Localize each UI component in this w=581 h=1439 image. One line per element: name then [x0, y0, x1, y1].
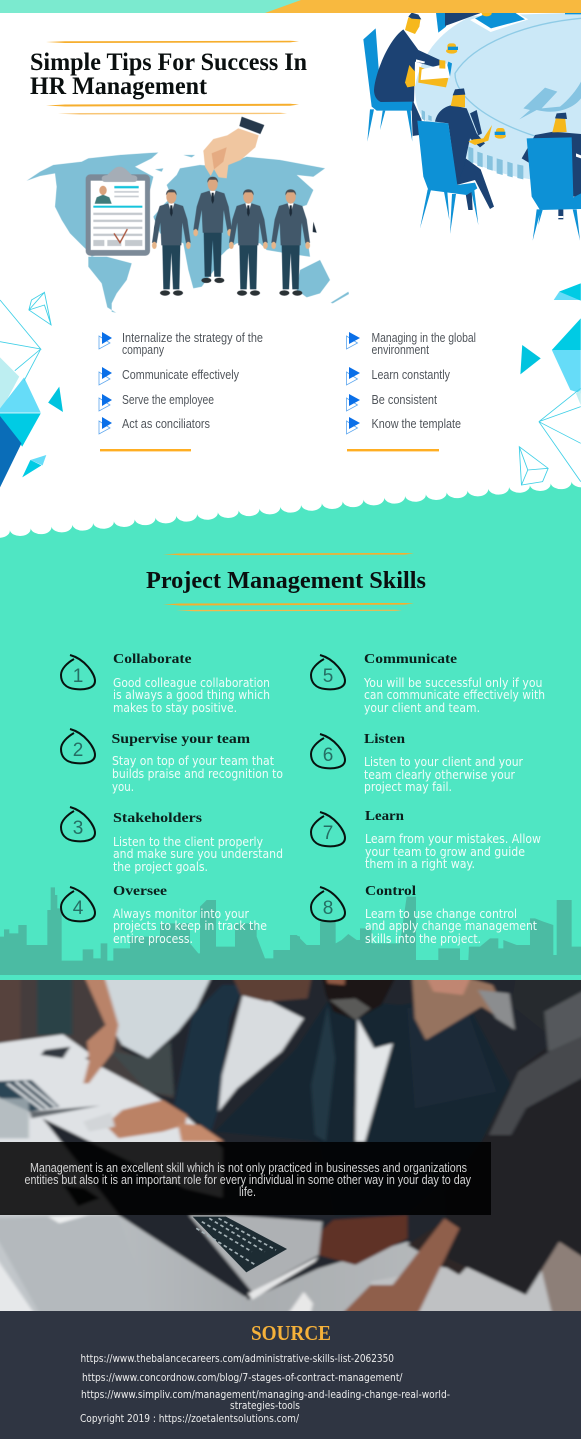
teal section background with scalloped edge: [0, 470, 581, 980]
skill 7: Learn: Learn: [365, 809, 404, 824]
skill 2: Supervise your team: you.: [112, 779, 134, 794]
bullet icon: [346, 332, 360, 349]
dark caption bar: life.: [239, 1185, 256, 1199]
hand picking candidate: [203, 117, 264, 178]
bullet text: company: [122, 342, 164, 357]
bullet icon: [99, 332, 112, 349]
number badge: 6: [323, 745, 333, 766]
team photo scene: [0, 962, 581, 1328]
skill 4: Oversee: entire process.: [113, 931, 193, 946]
source links: https://www.thebalancecareers.com/administrative-skills-list-2062350: [80, 1352, 394, 1365]
number badge: [311, 812, 345, 846]
man 4: [271, 189, 310, 296]
skill 6: Listen: project may fail.: [364, 779, 452, 794]
number badge: [311, 887, 345, 921]
person 2: [417, 88, 499, 234]
skill 2: Supervise your team: Stay on top of your team that: [112, 753, 274, 768]
skill 2: Supervise your team: Supervise your team: [112, 732, 250, 747]
blond hair woman: [410, 980, 498, 1042]
skill 4: Oversee: Oversee: [113, 884, 167, 899]
title: HR Management: [30, 73, 208, 100]
skill 6: Listen: [311, 732, 524, 794]
skill 5: Communicate: your client and team.: [364, 700, 480, 715]
section heading: Project Management Skills: [146, 567, 426, 594]
cups: [446, 48, 457, 54]
number badge: [311, 734, 345, 768]
bullet icon: [346, 417, 360, 434]
skill 8: Control: [311, 884, 537, 946]
skill 1: Collaborate: Collaborate: [113, 652, 192, 667]
bullet text: Communicate effectively: [122, 367, 239, 382]
right geometric decoration: [519, 283, 581, 485]
bullet icon: [99, 367, 112, 385]
skill 5: Communicate: Communicate: [364, 652, 457, 667]
person 3: [522, 113, 581, 241]
dark caption bar: [0, 1142, 491, 1215]
skill 8: Control: Control: [365, 884, 416, 899]
clipboard: [86, 167, 150, 256]
laptop keyboard: [193, 1217, 287, 1272]
number badge: [311, 655, 345, 689]
man 1: [152, 189, 191, 296]
tips list: left column: [99, 330, 263, 451]
dark caption bar: Management is an excellent skill which is not only practiced in businesses and organizations: [30, 1161, 467, 1175]
number badge: 2: [73, 740, 83, 761]
dark caption bar: entities but also it is an important role for every individual in some other way in your day to day: [24, 1173, 472, 1187]
man 2: [193, 177, 232, 283]
skill 7: Learn: them in a right way.: [365, 856, 475, 871]
skill 3: Stakeholders: [61, 807, 283, 874]
bullet text: Act as conciliators: [122, 416, 210, 431]
title underline strokes: [46, 41, 299, 114]
skill 8: Control: and apply change management: [365, 918, 537, 933]
second person: [174, 985, 244, 1132]
title: Simple Tips For Success In: [30, 49, 307, 76]
table top: [0, 1034, 222, 1228]
section heading strokes: [163, 553, 414, 611]
table: [415, 13, 581, 184]
number badge: [61, 729, 95, 763]
skill 1: Collaborate: Good colleague collaboration: [113, 675, 270, 690]
left laptop and glass: [0, 1080, 59, 1112]
number badge: [61, 887, 95, 921]
skill 6: Listen: Listen to your client and your: [364, 754, 524, 769]
number badge: 5: [323, 666, 333, 687]
source links: https://www.concordnow.com/blog/7-stages-of-contract-management/: [82, 1371, 403, 1384]
bullet icon: [346, 367, 360, 385]
source links: Copyright 2019 : https://zoetalentsolutions.com/: [80, 1412, 299, 1425]
skill 8: Control: Learn to use change control: [365, 906, 517, 921]
number badge: 7: [323, 823, 333, 844]
bullet text: [372, 330, 476, 357]
laptop: [42, 1118, 248, 1298]
skill 3: Stakeholders: Listen to the client properly: [113, 834, 264, 849]
central man T-shirt: [356, 1018, 393, 1142]
number badge: 4: [73, 898, 84, 919]
skill 3: Stakeholders: Stakeholders: [113, 811, 203, 826]
bullet text: Internalize the strategy of the: [122, 330, 263, 345]
right person: [449, 1107, 581, 1296]
bullet icon: [346, 394, 360, 411]
skill 8: Control: skills into the project.: [365, 931, 481, 946]
title: [30, 49, 307, 100]
skill 1: Collaborate: makes to stay positive.: [113, 700, 237, 715]
meeting table illustration: [363, 11, 581, 241]
tips list: right column: [346, 330, 476, 451]
skill 5: Communicate: You will be successful only if you: [363, 675, 542, 690]
map: [27, 152, 349, 313]
number badge: [61, 807, 95, 841]
number badge: 8: [323, 898, 333, 919]
bullet text: Serve the employee: [122, 392, 214, 407]
source links: strategies-tools: [230, 1399, 300, 1412]
city skyline silhouette: [0, 887, 581, 975]
skill 4: Oversee: Always monitor into your: [113, 906, 250, 921]
skill 6: Listen: Listen: [364, 732, 405, 747]
bullet icon: [99, 417, 112, 434]
world map with candidates illustration: [27, 117, 349, 313]
table front: [0, 1215, 445, 1311]
bullet text: environment: [372, 342, 429, 357]
number badge: 3: [73, 818, 83, 839]
beard and skin: [322, 980, 394, 1018]
skill 7: Learn: your team to grow and guide: [365, 844, 525, 859]
hands: [106, 1100, 187, 1138]
source links: [80, 1352, 450, 1425]
bullet text: Know the template: [372, 416, 461, 431]
bullet text: Learn constantly: [372, 367, 450, 382]
top colour bar: [0, 0, 581, 13]
skill 7: Learn: Learn from your mistakes. Allow: [365, 831, 541, 846]
source panel: [0, 1311, 581, 1439]
source links: https://www.simpliv.com/management/managing-and-leading-change-real-world-: [81, 1388, 450, 1401]
skill 5: Communicate: [311, 652, 545, 715]
central man jacket: [218, 1002, 510, 1142]
left geometric decoration: [0, 292, 63, 487]
skill 6: Listen: team clearly otherwise your: [364, 767, 516, 782]
skill 4: Oversee: projects to keep in track the: [113, 918, 267, 933]
skill 7: Learn: [311, 809, 541, 871]
white shirt person: [102, 980, 213, 1060]
bullet icon: [99, 394, 112, 411]
man 3: [229, 189, 268, 296]
background wall: [20, 980, 122, 1049]
top chair and papers: [436, 13, 446, 33]
skill 3: Stakeholders: the project goals.: [113, 859, 208, 874]
person 1: [363, 13, 452, 142]
skill 1: Collaborate: is always a good thing which: [113, 687, 270, 702]
bullet text: Managing in the global: [372, 330, 476, 345]
skill 3: Stakeholders: and make sure you understand: [113, 846, 283, 861]
skill 5: Communicate: can communicate effectively with: [364, 687, 545, 702]
skill 2: Supervise your team: [61, 729, 283, 794]
skill 2: Supervise your team: builds praise and recognition to: [112, 766, 283, 781]
number badge: [61, 655, 95, 689]
source heading: SOURCE: [251, 1321, 331, 1345]
bullet text: Be consistent: [372, 392, 437, 407]
bullet text: [122, 330, 263, 357]
skill 4: Oversee: [61, 884, 267, 946]
skill 1: Collaborate: [61, 652, 270, 715]
number badge: 1: [73, 666, 83, 687]
